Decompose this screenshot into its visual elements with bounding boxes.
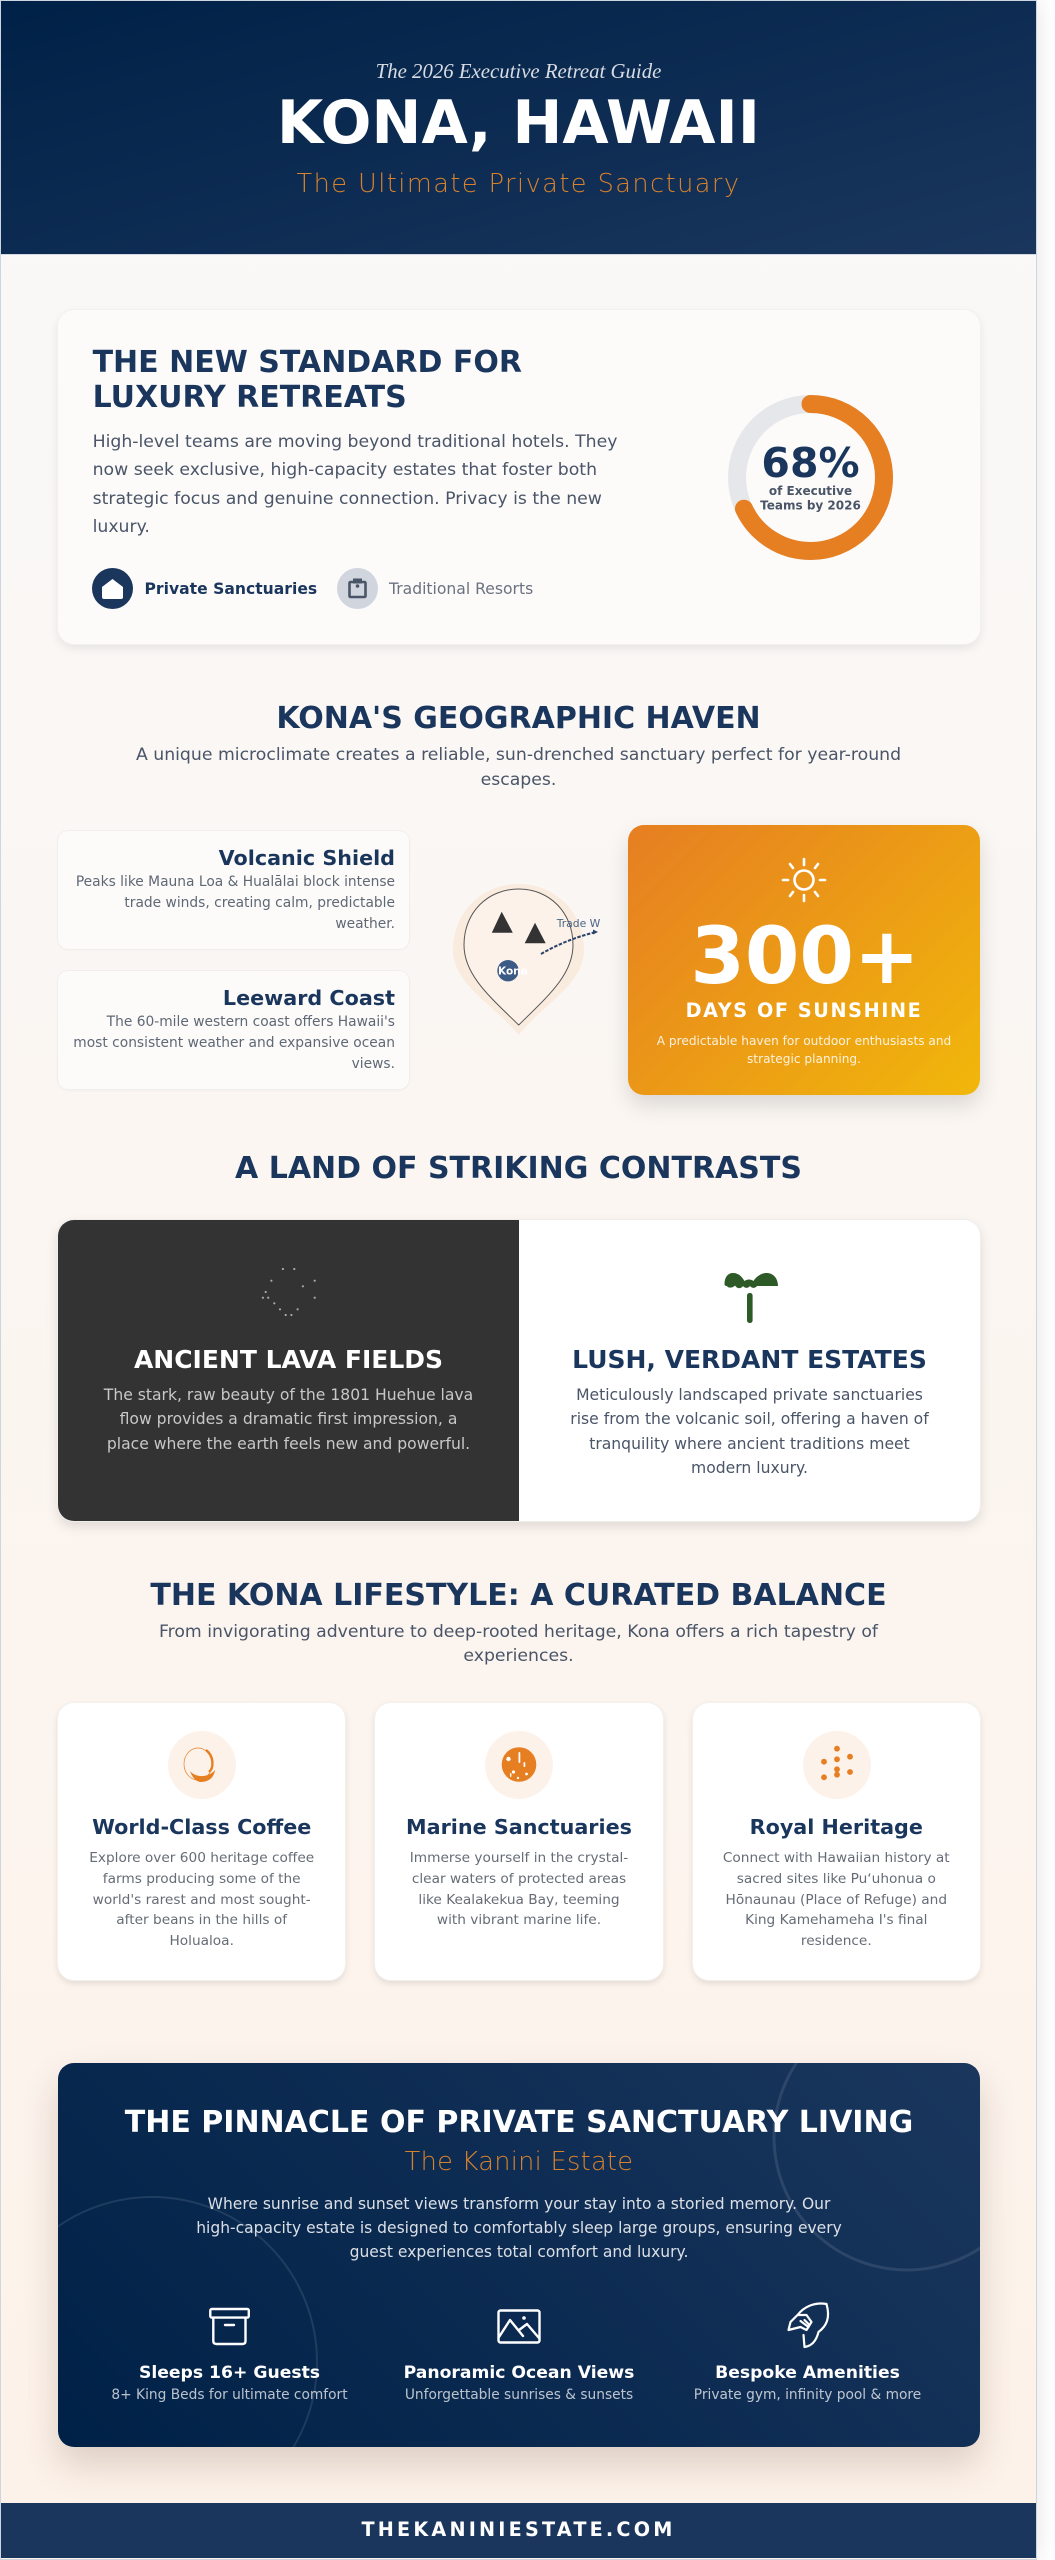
pane text: flow provides a dramatic first impression, a bbox=[120, 1410, 457, 1428]
stat number: 300+ bbox=[690, 911, 920, 1002]
card text: Holualoa. bbox=[169, 1933, 234, 1949]
lifestyle intro: experiences. bbox=[463, 1646, 574, 1666]
pane: ancient lava fields bbox=[58, 1220, 519, 1521]
card text: Explore over 600 heritage coffee bbox=[89, 1850, 314, 1866]
icon: storage box bbox=[209, 2308, 250, 2346]
pane: lush verdant estates bbox=[570, 1273, 930, 1477]
icon: heritage dots bbox=[803, 1731, 871, 1799]
panel heading bbox=[92, 345, 522, 414]
card text bbox=[89, 1850, 314, 1949]
pane heading: ANCIENT LAVA FIELDS bbox=[134, 1345, 443, 1374]
card text bbox=[410, 1850, 628, 1928]
icon: sun bbox=[782, 858, 826, 902]
icon: landscape picture bbox=[497, 2309, 541, 2344]
card text: residence. bbox=[801, 1933, 872, 1949]
panel paragraph bbox=[196, 2195, 842, 2261]
legend: private sanctuaries versus traditional resorts bbox=[92, 568, 533, 609]
icon: private sanctuaries house bbox=[92, 568, 133, 609]
card: leeward coast bbox=[58, 971, 409, 1089]
lifestyle intro: From invigorating adventure to deep-rooted heritage, Kona offers a rich tapestry of bbox=[159, 1622, 878, 1642]
pane heading: LUSH, VERDANT ESTATES bbox=[572, 1345, 927, 1374]
heading: striking contrasts: A LAND OF STRIKING CONTRASTS bbox=[235, 1151, 802, 1186]
geographic haven intro bbox=[136, 745, 901, 790]
heading: geographic haven: KONA'S GEOGRAPHIC HAVEN bbox=[276, 701, 761, 736]
card text: Immerse yourself in the crystal- bbox=[410, 1850, 628, 1866]
card heading: Royal Heritage bbox=[750, 1815, 923, 1839]
card: marine sanctuaries bbox=[375, 1703, 663, 1980]
header eyebrow: The 2026 Executive Retreat Guide bbox=[376, 60, 661, 83]
chart: 68 percent donut bbox=[728, 395, 893, 560]
amenity title: Sleeps 16+ Guests bbox=[139, 2363, 320, 2383]
pane text: modern luxury. bbox=[691, 1459, 808, 1477]
amenity caption: Private gym, infinity pool & more bbox=[694, 2387, 921, 2403]
panel heading: LUXURY RETREATS bbox=[93, 380, 407, 414]
pane text: rise from the volcanic soil, offering a haven of bbox=[570, 1410, 929, 1428]
icon: lava dots bbox=[262, 1268, 316, 1316]
geographic haven intro: A unique microclimate creates a reliable, sun-drenched sanctuary perfect for year-round bbox=[136, 745, 901, 765]
card heading: Marine Sanctuaries bbox=[406, 1815, 632, 1839]
panel body text: now seek exclusive, high-capacity estates that foster both bbox=[93, 460, 597, 480]
icon: rocket sketch bbox=[787, 2302, 830, 2348]
pane text: tranquility where ancient traditions meet bbox=[589, 1435, 910, 1453]
amenity: panoramic ocean views bbox=[404, 2309, 634, 2403]
chart: 68 percent donut: of Executive bbox=[769, 484, 852, 498]
stat caption: A predictable haven for outdoor enthusiasts and bbox=[657, 1034, 951, 1048]
icon: palm tree bbox=[724, 1273, 778, 1323]
footer website: THEKANINIESTATE.COM bbox=[361, 2518, 676, 2541]
lifestyle intro bbox=[159, 1622, 878, 1666]
card text: Peaks like Mauna Loa & Hualālai block intense bbox=[76, 874, 395, 890]
card heading: Leeward Coast bbox=[223, 986, 395, 1010]
card: royal heritage bbox=[693, 1703, 980, 1980]
card text: Connect with Hawaiian history at bbox=[723, 1850, 950, 1866]
stat card: 300+ days of sunshine bbox=[628, 825, 980, 1095]
panel body text bbox=[93, 432, 617, 537]
card: world-class coffee bbox=[58, 1703, 345, 1980]
card text: weather. bbox=[335, 916, 395, 932]
heading: kona lifestyle: THE KONA LIFESTYLE: A CURATED BALANCE bbox=[150, 1578, 887, 1613]
amenity: bespoke amenities bbox=[694, 2302, 921, 2403]
pane text bbox=[104, 1386, 473, 1453]
card text: views. bbox=[352, 1056, 395, 1072]
main title: KONA, HAWAII bbox=[277, 88, 760, 158]
icon: coffee ring bbox=[168, 1731, 236, 1799]
card text: The 60-mile western coast offers Hawaii's bbox=[107, 1014, 395, 1030]
card text: clear waters of protected areas bbox=[412, 1871, 626, 1887]
map: island pin with volcanoes, Kona and trade winds bbox=[453, 884, 601, 1035]
card text: farms producing some of the bbox=[103, 1871, 301, 1887]
pane text: place where the earth feels new and powerful. bbox=[107, 1435, 470, 1453]
card text bbox=[76, 874, 395, 932]
geographic haven intro: escapes. bbox=[481, 770, 556, 790]
map: island pin with volcanoes, Kona and trade winds: Kona bbox=[498, 966, 528, 978]
card text: world's rarest and most sought- bbox=[93, 1892, 311, 1908]
card text: most consistent weather and expansive ocean bbox=[73, 1035, 395, 1051]
chart: 68 percent donut: Teams by 2026 bbox=[760, 498, 861, 512]
amenity title: Bespoke Amenities bbox=[715, 2363, 900, 2383]
header banner bbox=[1, 1, 1036, 254]
estate name: The Kanini Estate bbox=[405, 2147, 633, 2177]
panel body text: luxury. bbox=[93, 517, 150, 537]
panel: pinnacle of private sanctuary living bbox=[58, 2063, 980, 2447]
pane text: Meticulously landscaped private sanctuaries bbox=[576, 1386, 923, 1404]
panel paragraph: Where sunrise and sunset views transform your stay into a storied memory. Our bbox=[208, 2195, 830, 2213]
card text: with vibrant marine life. bbox=[437, 1912, 601, 1928]
chart: 68 percent donut: 68% bbox=[761, 439, 860, 487]
pane text bbox=[570, 1386, 930, 1477]
panel: contrasts bbox=[58, 1220, 980, 1521]
label: private sanctuaries: Private Sanctuaries bbox=[144, 580, 317, 598]
stat label: DAYS OF SUNSHINE bbox=[686, 999, 922, 1022]
card heading: World-Class Coffee bbox=[92, 1815, 311, 1839]
pane text: The stark, raw beauty of the 1801 Huehue lava bbox=[104, 1386, 473, 1404]
amenity title: Panoramic Ocean Views bbox=[404, 2363, 634, 2383]
amenity: sleeps 16+ guests bbox=[111, 2308, 348, 2403]
card text: sacred sites like Puʻuhonua o bbox=[737, 1871, 936, 1887]
icon: marine globe bbox=[485, 1731, 553, 1799]
card text bbox=[73, 1014, 395, 1072]
amenity caption: Unforgettable sunrises & sunsets bbox=[405, 2387, 633, 2403]
stat caption: strategic planning. bbox=[747, 1052, 861, 1066]
card text: King Kamehameha I's final bbox=[745, 1912, 927, 1928]
panel paragraph: guest experiences total comfort and luxury. bbox=[350, 2243, 688, 2261]
icon: traditional resorts clipboard bbox=[337, 568, 378, 609]
panel: new standard for luxury retreats bbox=[58, 310, 980, 644]
card text: after beans in the hills of bbox=[116, 1912, 287, 1928]
card: volcanic shield bbox=[58, 831, 409, 949]
stat caption bbox=[656, 1034, 951, 1066]
panel heading: THE PINNACLE OF PRIVATE SANCTUARY LIVING bbox=[125, 2104, 913, 2140]
header tagline: The Ultimate Private Sanctuary bbox=[297, 168, 740, 198]
panel body text: High-level teams are moving beyond traditional hotels. They bbox=[93, 432, 617, 452]
panel body text: strategic focus and genuine connection. Privacy is the new bbox=[93, 489, 602, 509]
panel heading: THE NEW STANDARD FOR bbox=[93, 345, 522, 380]
amenity caption: 8+ King Beds for ultimate comfort bbox=[111, 2387, 348, 2403]
label: traditional resorts: Traditional Resorts bbox=[389, 580, 533, 598]
card text: Hōnaunau (Place of Refuge) and bbox=[726, 1892, 947, 1908]
panel paragraph: high-capacity estate is designed to comfortably sleep large groups, ensuring every bbox=[196, 2219, 842, 2237]
map: island pin with volcanoes, Kona and trade winds: Trade W bbox=[556, 917, 601, 930]
card text: trade winds, creating calm, predictable bbox=[124, 895, 395, 911]
card text: like Kealakekua Bay, teeming bbox=[418, 1892, 620, 1908]
card text bbox=[723, 1850, 950, 1949]
footer bar bbox=[1, 2503, 1036, 2558]
card heading: Volcanic Shield bbox=[219, 846, 395, 870]
